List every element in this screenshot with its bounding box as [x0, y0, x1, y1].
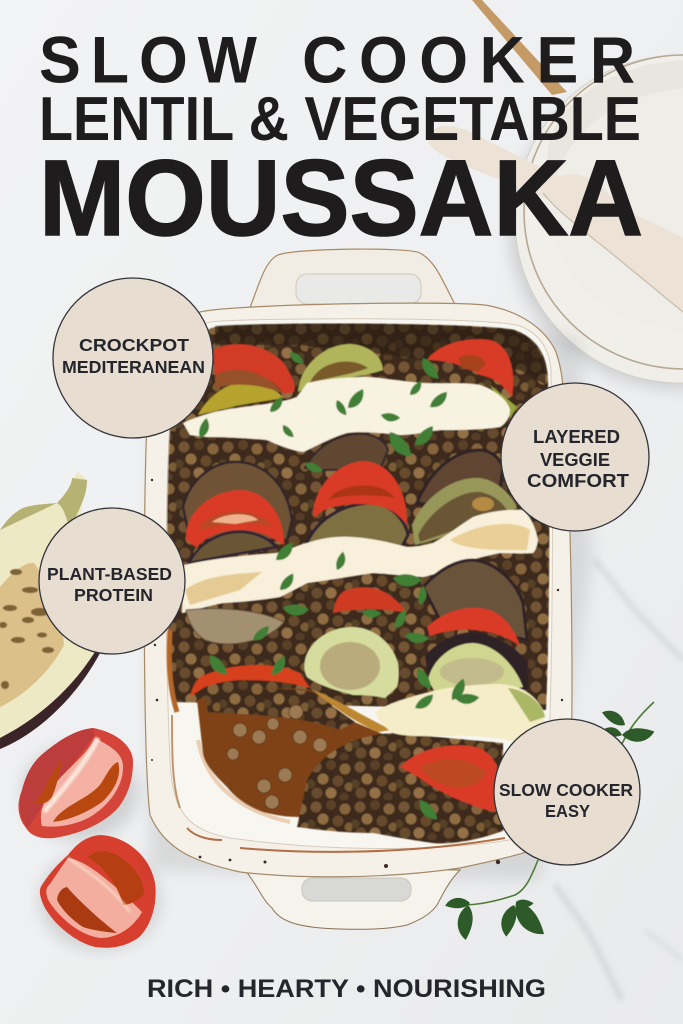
title line 1: SLOW — [39, 23, 267, 97]
slice: tomato bottom — [400, 745, 497, 812]
slice: tomato crescent — [190, 665, 310, 697]
badge text: PLANT-BASED — [47, 564, 172, 584]
badge text — [499, 780, 633, 821]
title — [39, 23, 647, 258]
slice: zucchini right — [412, 478, 517, 545]
dish body — [144, 303, 572, 877]
badge: slow cooker easy — [494, 719, 640, 865]
baked-on sauce stains — [172, 715, 505, 852]
bottom handle opening — [302, 878, 411, 901]
slice: eggplant lower left — [189, 532, 276, 563]
badge text: MEDITERANEAN — [62, 357, 205, 377]
slice: tomato top left — [213, 344, 295, 394]
slice: zucchini centre — [304, 627, 399, 698]
cheese layer bottom — [375, 684, 545, 744]
casserole lentil base — [167, 324, 549, 710]
stacked plates — [510, 55, 683, 388]
halved eggplant — [0, 472, 102, 749]
badge text — [47, 564, 172, 605]
scooped-out gravy — [197, 688, 400, 832]
slice: tomato centre — [313, 461, 407, 525]
badge text: LAYERED — [533, 427, 620, 447]
slice: eggplant behind right zucchini — [425, 632, 528, 690]
badge text — [62, 335, 205, 377]
badge text: CROCKPOT — [79, 335, 189, 355]
badge: crockpot mediterranean — [53, 278, 213, 438]
dark sauce shade — [215, 324, 546, 385]
herb leaves on casserole — [194, 349, 479, 823]
golden cut edge — [312, 690, 392, 732]
cheese layer top — [183, 377, 510, 452]
cheese layer middle — [182, 510, 538, 613]
casserole edge — [169, 630, 177, 712]
badge text: PROTEIN — [74, 585, 153, 605]
serving spoons — [428, 126, 683, 312]
lentils at top of gravy — [205, 689, 355, 730]
baking dish — [144, 249, 592, 929]
slice: tomato left — [186, 490, 284, 548]
parsley sprig right — [601, 702, 654, 772]
badge text: VEGGIE — [540, 450, 610, 470]
badge text: SLOW COOKER — [499, 780, 633, 800]
slice: eggplant centre — [305, 434, 388, 470]
slice: zucchini top right edge — [490, 385, 517, 418]
title line 1 — [39, 23, 647, 97]
badge text — [527, 427, 629, 491]
slice: tomato row three — [333, 587, 407, 613]
slice: eggplant left row three — [186, 608, 284, 644]
tomato half lower — [40, 835, 160, 950]
top handle — [246, 249, 456, 316]
title line 3: MOUSSAKA — [39, 137, 643, 258]
slice: tomato top right — [427, 339, 513, 397]
bottom handle — [243, 868, 460, 929]
slice: zucchini right — [428, 643, 523, 692]
slice: zucchini top — [298, 344, 383, 392]
badge: plant-based protein — [39, 508, 185, 654]
top handle opening — [296, 274, 421, 304]
dish shadow — [150, 320, 592, 880]
slice: eggplant right — [417, 450, 503, 505]
dish inner wall — [166, 319, 552, 848]
slice: zucchini left — [198, 381, 284, 415]
slice: eggplant right row three — [423, 560, 527, 640]
wooden utensil — [472, 0, 567, 95]
cheese edge zucchini — [508, 688, 545, 722]
slice: tomato right row three — [427, 608, 520, 646]
badge text: EASY — [545, 801, 590, 821]
title line 1: COOKER — [302, 23, 647, 97]
slice: eggplant left — [183, 462, 292, 540]
tomato half upper — [19, 728, 138, 840]
badge text: COMFORT — [527, 471, 629, 491]
slice: eggplant lower centre — [306, 503, 408, 550]
tagline: RICH • HEARTY • NOURISHING — [147, 975, 546, 1003]
cheese browning — [185, 524, 530, 605]
gravy lentils — [227, 705, 327, 809]
parsley sprig bottom — [445, 860, 545, 941]
casserole food — [167, 324, 549, 843]
exposed lentil pile — [297, 733, 505, 843]
badge: layered veggie comfort — [501, 383, 649, 531]
dish speckles — [151, 479, 563, 868]
